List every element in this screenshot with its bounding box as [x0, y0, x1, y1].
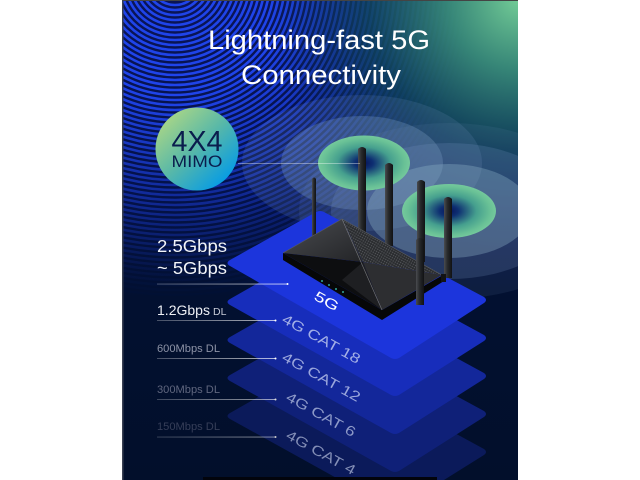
router — [283, 147, 452, 320]
label: 300Mbps DL: 300Mbps DL — [157, 384, 220, 396]
label: 600Mbps DL — [157, 343, 276, 360]
layer: 5G — [228, 211, 486, 359]
layer: 4G CAT 6 — [228, 359, 486, 472]
infographic panel — [122, 0, 518, 480]
router top: left facet — [283, 219, 363, 262]
layer: 4G CAT 4 — [228, 397, 486, 480]
label: 2.5Gbps to 5Gbps: ~ 5Gbps — [157, 258, 227, 278]
label: 300Mbps DL — [157, 384, 276, 400]
4X4 MIMO connector line — [238, 163, 360, 164]
layer label: 4G CAT 12: 4G CAT 12 — [280, 349, 364, 405]
right foot — [441, 274, 446, 282]
layer label: 5G: 5G — [312, 288, 342, 314]
layer label: 4G CAT 18: 4G CAT 18 — [280, 311, 364, 367]
label: 1.2Gbps DL — [157, 305, 276, 322]
label: 150Mbps DL — [157, 421, 276, 438]
title: Lightning-fast 5G — [208, 25, 430, 55]
4X4 MIMO badge — [156, 108, 238, 190]
4X4 MIMO badge: MIMO — [172, 152, 222, 171]
router top: mesh facet — [342, 219, 442, 275]
4X4 MIMO badge: 4X4 — [172, 126, 222, 158]
label: 2.5Gbps to 5Gbps — [157, 236, 288, 285]
title: Connectivity — [241, 60, 402, 90]
signal spot: second — [402, 184, 496, 238]
signal rings: first router zone — [242, 95, 482, 231]
router top: right facet — [363, 262, 442, 310]
layer label: 4G CAT 6: 4G CAT 6 — [284, 389, 359, 440]
signal spot: first — [318, 136, 410, 190]
router body side — [283, 253, 444, 320]
bottom black bar — [203, 477, 437, 480]
front antenna — [416, 238, 424, 305]
label: 1.2Gbps DL: 1.2Gbps — [157, 303, 210, 318]
layer label: 4G CAT 4: 4G CAT 4 — [284, 427, 359, 478]
layer: 4G CAT 18 — [228, 282, 486, 396]
back antennas — [312, 147, 452, 278]
label: 2.5Gbps to 5Gbps: 2.5Gbps — [157, 236, 227, 256]
layer: 4G CAT 12 — [228, 321, 486, 434]
background with concentric rings — [122, 0, 518, 480]
label: 600Mbps DL: 600Mbps DL — [157, 343, 220, 355]
title — [208, 25, 430, 90]
status LEDs — [321, 280, 344, 293]
label: 150Mbps DL: 150Mbps DL — [157, 421, 220, 433]
signal rings: second router zone — [299, 123, 518, 296]
label: 1.2Gbps DL: DL — [213, 306, 227, 318]
router top: front facet — [283, 253, 382, 310]
